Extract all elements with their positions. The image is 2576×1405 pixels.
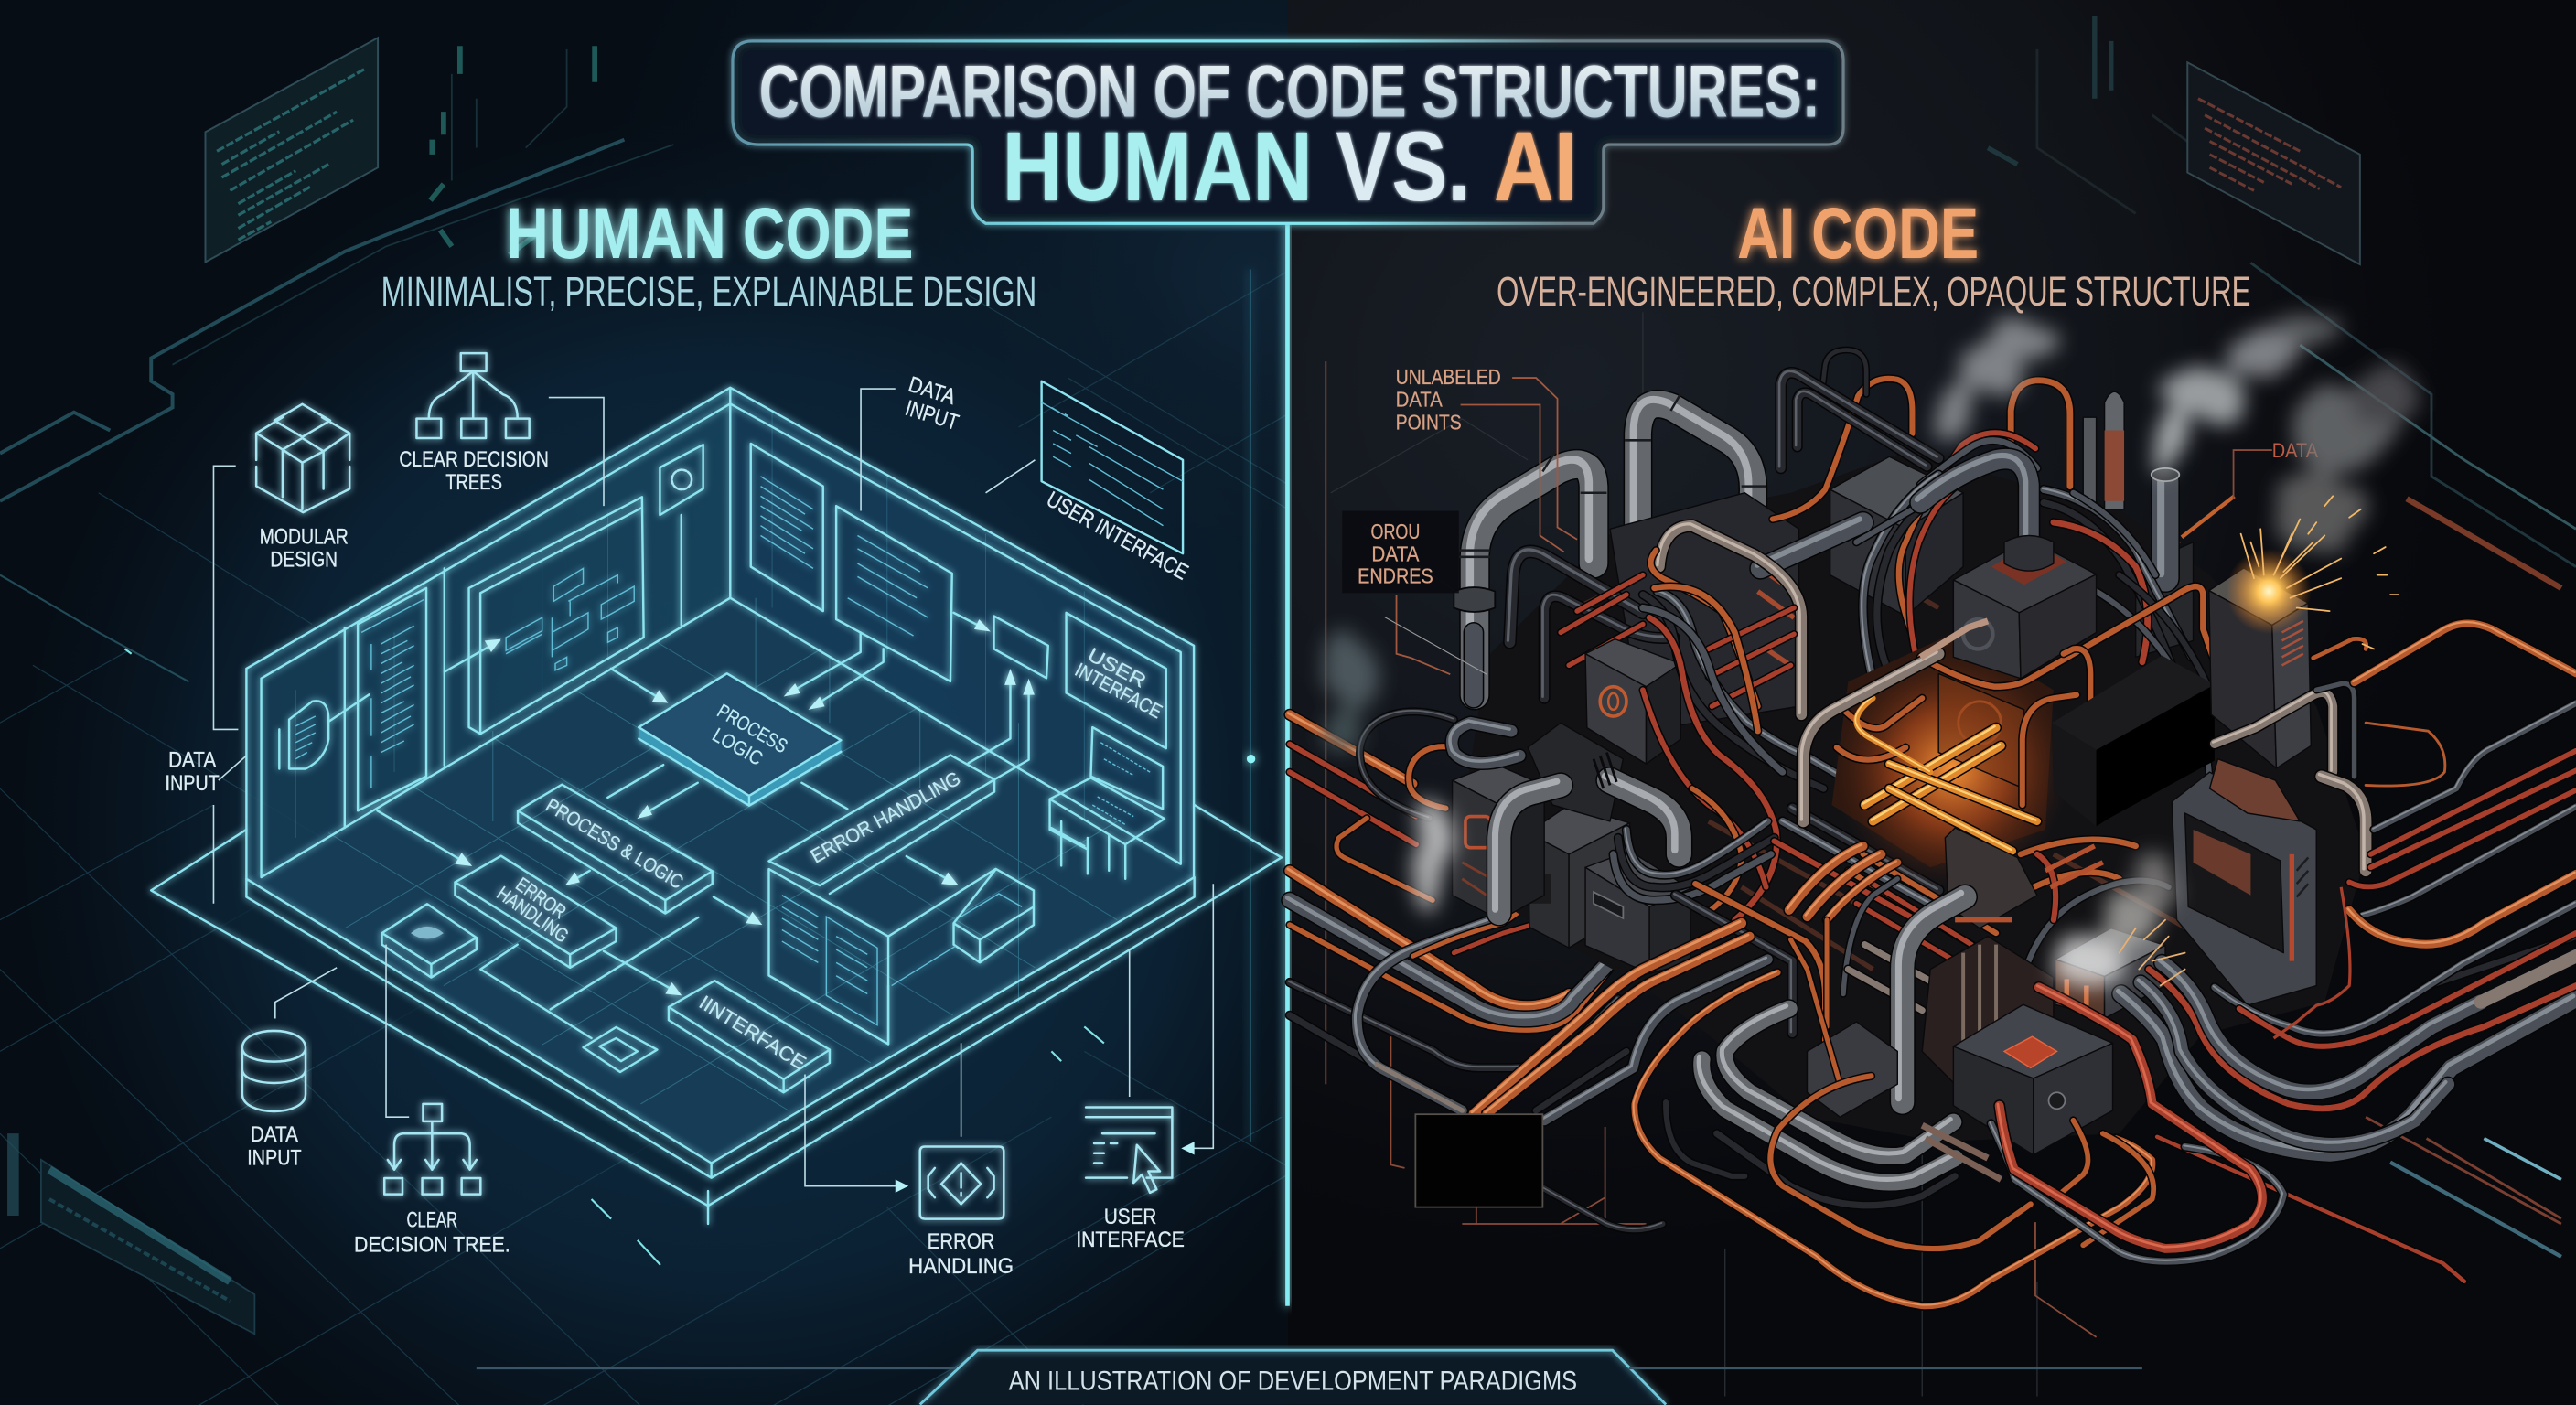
AI side: red-boxed label DATA callout [2234, 439, 2318, 499]
AI side: main cable flows [1614, 586, 2169, 1067]
label: clear decision trees: TREES [445, 470, 502, 495]
block: error handling large: ERROR HANDLING [807, 767, 964, 868]
AI side: lower bundles [1472, 921, 2152, 1306]
label: error handling: ERROR [928, 1229, 994, 1254]
box clamp [1528, 723, 1623, 821]
background circuit traces left [0, 140, 673, 681]
label: error handling [908, 1229, 1014, 1279]
callout: unlabeled data points: UNLABELED [1396, 365, 1501, 389]
block: interface: IINTERFACE [695, 991, 810, 1074]
block: process logic: PROCESS [714, 699, 791, 757]
adapter block [1922, 828, 2103, 1084]
label: data input rotated: INPUT [902, 396, 961, 435]
title line 2: HUMAN VS. AI [1003, 111, 1577, 221]
callout: dark data endres label: ENDRES [1358, 564, 1433, 588]
callout: unlabeled data points [1396, 365, 1577, 552]
block: error handling small: HANDLING [493, 882, 574, 948]
label: error handling: HANDLING [908, 1254, 1014, 1279]
background: human side [0, 0, 1288, 1405]
steel riser [1898, 893, 1965, 1102]
block: error handling small [455, 856, 616, 968]
desk terminal [1050, 727, 1165, 879]
floating code panel top left [205, 38, 595, 262]
wall: small status panel [969, 616, 1048, 779]
subtitle: human code: MINIMALIST, PRECISE, EXPLAINABLE DESIGN [381, 268, 1036, 315]
chip nodes [382, 904, 698, 1072]
label: user interface rotated: USER INTERFACE [1042, 487, 1192, 585]
black redacted rectangle [1415, 1114, 1542, 1207]
block: process logic: LOGIC [709, 723, 767, 770]
subtitle: AI code: OVER-ENGINEERED, COMPLEX, OPAQUE STRUCTURE [1497, 268, 2250, 315]
label: clear decision tree: CLEAR [406, 1208, 457, 1233]
block: process logic [639, 673, 841, 806]
floating code panel top right [1988, 16, 2360, 264]
label: data input bottom: DATA [251, 1122, 299, 1147]
label: clear decision trees: CLEAR DECISION [399, 447, 549, 472]
box D [1585, 851, 1690, 973]
title panel [733, 41, 1843, 223]
label: data input rotated [902, 372, 961, 435]
floating panel bottom left [13, 1133, 254, 1334]
AI side: lower front box with red icon [1922, 1004, 2113, 1179]
icon: clear decision tree bottom [384, 1104, 480, 1195]
floor and wall fills [151, 388, 1282, 1206]
wall: right code panels [751, 444, 991, 710]
wall: gear panel [660, 445, 703, 626]
block: error handling small: ERROR [511, 873, 571, 923]
background: AI side [1288, 0, 2576, 1405]
callout: dark data endres label [1342, 511, 1487, 674]
footer text: AN ILLUSTRATION OF DEVELOPMENT PARADIGMS [1009, 1366, 1577, 1396]
wall: document icon and arrows [279, 639, 501, 768]
AI side: spark box [2209, 549, 2312, 768]
callout: unlabeled data points: DATA [1396, 388, 1443, 412]
smoking box [2055, 928, 2165, 1018]
heading: human code: HUMAN CODE [506, 192, 914, 273]
AI side: right upper grey pipes [2182, 496, 2445, 871]
icon: error handling [920, 1147, 1004, 1219]
AI side: lower right cable run [1990, 956, 2576, 1261]
label: data input bottom [247, 1122, 302, 1170]
structural outlines [151, 388, 1282, 1224]
icon: user interface panel floating [1042, 381, 1183, 553]
background circuit traces right [2037, 49, 2576, 567]
sparks [2120, 496, 2399, 986]
isometric blueprint: human code architecture [151, 388, 1282, 1224]
label: clear decision tree: DECISION TREE. [354, 1232, 510, 1257]
leader lines, human side [213, 389, 1213, 1193]
smoke plumes [1325, 312, 2419, 986]
label: clear decision trees [399, 447, 549, 495]
star glints [124, 649, 1104, 1265]
AI side: machine shadow mass [1454, 452, 2366, 1142]
footer tab [477, 1350, 2142, 1405]
AI side: copper over-wires [1801, 586, 2215, 821]
label: data input left: INPUT [165, 771, 220, 796]
AI side: red-boxed label DATA callout: DATA [2272, 439, 2318, 462]
label: data input rotated: DATA [906, 372, 959, 410]
icon: modular design cube [256, 404, 349, 512]
AI side: central box with cable [1917, 456, 2097, 679]
riser base [1791, 920, 1897, 1117]
center divider [1247, 223, 1287, 1306]
AI side: black redacted box [2052, 656, 2215, 826]
heading: AI code: AI CODE [1737, 192, 1979, 273]
callout: unlabeled data points: POINTS [1396, 410, 1462, 434]
AI side: big rear steel pipes [1454, 391, 1766, 698]
heading: AI code [1497, 192, 2250, 315]
box A [1585, 639, 1680, 764]
AI side: background guide traces [1326, 361, 2277, 1337]
label: modular design [260, 524, 349, 573]
label: data input left: DATA [168, 748, 217, 773]
block: interface [669, 981, 830, 1092]
icon: clear decision trees [416, 353, 530, 438]
wall: code panel [358, 588, 426, 810]
callout: dark data endres label: OROU [1371, 520, 1420, 543]
AI side: hot glowing core [1831, 632, 2070, 887]
AI side: thin top pipes [1773, 350, 2179, 578]
label: modular design: MODULAR [260, 524, 349, 549]
box C [1528, 805, 1630, 948]
heading: human code [381, 192, 1036, 315]
AI side: adapter, smoking box, lower box [1791, 828, 2165, 1117]
label: clear decision tree [354, 1208, 510, 1257]
label: modular design: DESIGN [270, 548, 338, 573]
wall: user interface panel: USER [1084, 643, 1150, 692]
AI side: front-left boxes [1453, 639, 1690, 973]
label: data input left [165, 748, 220, 796]
icon: user interface cursor [1086, 1107, 1172, 1193]
icon: database [242, 1031, 306, 1111]
box B [1453, 764, 1544, 920]
block: error handling large [768, 755, 995, 1044]
title line 1: COMPARISON OF CODE STRUCTURES: [759, 51, 1820, 134]
wall: user interface panel [1067, 613, 1166, 748]
AI side: tangle cables back layer [1508, 433, 2210, 788]
label: user interface: USER [1104, 1205, 1156, 1229]
label: data input bottom: INPUT [247, 1145, 302, 1170]
flow arrows [378, 669, 959, 995]
AI side: right long cables [2214, 622, 2576, 1046]
block: process and logic: PROCESS & LOGIC [542, 793, 688, 894]
wall: decision-flow panel [469, 497, 644, 734]
AI side: rear boxes [1610, 456, 2194, 731]
callout: dark data endres label: DATA [1371, 542, 1420, 565]
label: user interface: INTERFACE [1076, 1228, 1185, 1252]
AI side: long rail pipes [1287, 499, 2561, 1282]
cube component [892, 869, 1034, 986]
AI side: right screen box [2172, 759, 2316, 1005]
label: user interface [1076, 1205, 1185, 1252]
wall: user interface panel: INTERFACE [1071, 658, 1166, 723]
AI side: front-left steel elbows [1450, 721, 1679, 914]
